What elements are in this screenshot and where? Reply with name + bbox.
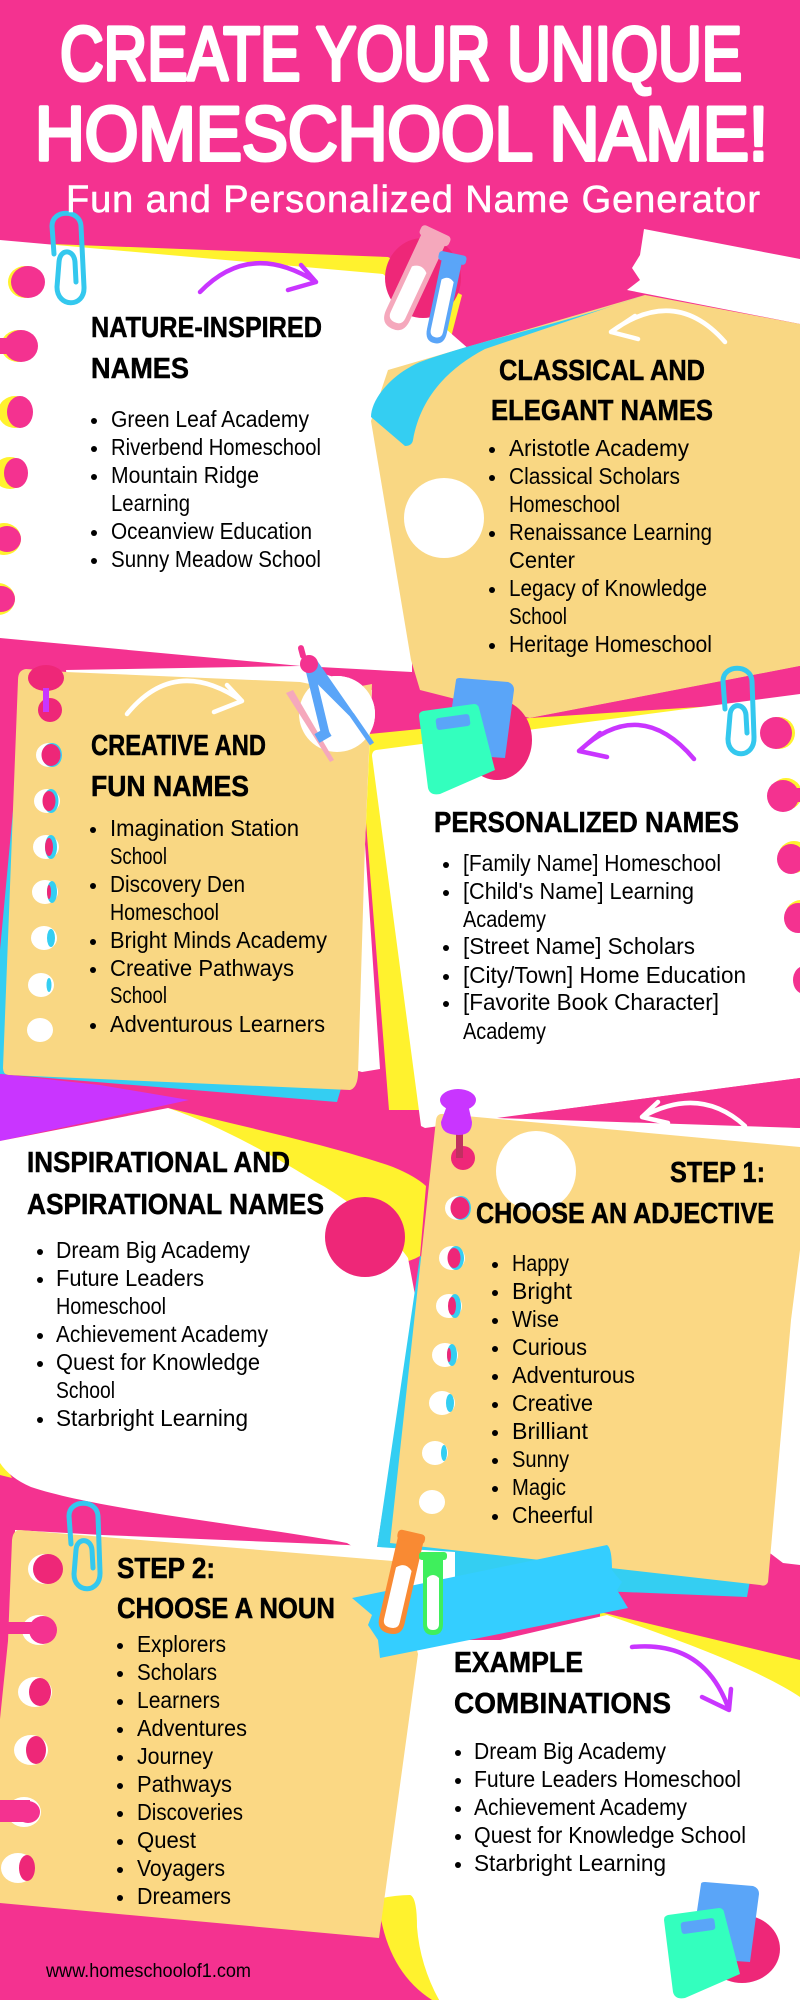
list: example combinations: Dream Big Academy bbox=[474, 1738, 666, 1764]
heading: creative and fun names bbox=[91, 730, 266, 803]
list: classical names: Center bbox=[509, 547, 575, 573]
arrow: purple curved bbox=[200, 263, 316, 292]
list: personalized names: Academy bbox=[463, 1018, 546, 1044]
panel: example combinations bbox=[378, 1612, 800, 2000]
icon: books bbox=[664, 1882, 780, 1998]
list: nouns: Voyagers bbox=[137, 1855, 225, 1881]
list: nouns: Adventures bbox=[137, 1715, 247, 1741]
list: classical names: Homeschool bbox=[509, 491, 620, 517]
heading: creative and fun names: CREATIVE AND bbox=[91, 730, 266, 762]
heading: personalized names: PERSONALIZED NAMES bbox=[434, 807, 739, 839]
icon: blue tape bbox=[352, 1545, 628, 1658]
list: adjectives: Wise bbox=[512, 1306, 559, 1332]
heading: inspirational and aspirational names: INSPIRATIONAL AND bbox=[27, 1147, 290, 1179]
list: creative names: School bbox=[110, 982, 167, 1008]
panel: nature-inspired names bbox=[0, 213, 470, 672]
list: personalized names: [Street Name] Scholars bbox=[463, 933, 695, 959]
list: adjectives: Curious bbox=[512, 1334, 587, 1360]
list: creative names: Adventurous Learners bbox=[110, 1011, 325, 1037]
list: inspirational names: Homeschool bbox=[56, 1293, 166, 1319]
title bbox=[35, 12, 768, 177]
list: adjectives: Cheerful bbox=[512, 1502, 593, 1528]
heading: step 1: STEP 1: bbox=[670, 1157, 765, 1189]
icon: test tubes pink and blue bbox=[377, 224, 467, 346]
panel: personalized names bbox=[359, 666, 800, 1128]
list: classical names: Aristotle Academy bbox=[509, 435, 689, 461]
list: inspirational names: Dream Big Academy bbox=[56, 1237, 250, 1263]
arrow: purple curved bbox=[579, 725, 694, 759]
list: creative names: Discovery Den bbox=[110, 871, 245, 897]
panel: creative and fun names bbox=[0, 644, 380, 1102]
list: example combinations: Starbright Learning bbox=[474, 1850, 666, 1876]
list: nouns: Discoveries bbox=[137, 1799, 243, 1825]
icon: test tubes orange and green bbox=[375, 1529, 447, 1637]
panel: step 2 choose a noun bbox=[0, 1503, 455, 1938]
list: example combinations: Quest for Knowledge School bbox=[474, 1822, 746, 1848]
panel: classical and elegant names bbox=[371, 229, 800, 718]
subtitle: Fun and Personalized Name Generator bbox=[66, 179, 760, 221]
heading: nature-inspired names bbox=[91, 312, 322, 385]
list: personalized names: [Favorite Book Character] bbox=[463, 989, 719, 1015]
heading: step 2: STEP 2: bbox=[117, 1553, 215, 1585]
list: personalized names: [City/Town] Home Education bbox=[463, 962, 746, 988]
list: nouns: Scholars bbox=[137, 1659, 217, 1685]
list: nature names: Sunny Meadow School bbox=[111, 546, 321, 572]
icon: hole punches bbox=[27, 743, 62, 1042]
arrow: white curved bbox=[611, 311, 725, 342]
list: adjectives: Brilliant bbox=[512, 1418, 589, 1444]
heading: step 2: CHOOSE A NOUN bbox=[117, 1593, 335, 1625]
list: creative names: Creative Pathways bbox=[110, 955, 294, 981]
list: personalized names: [Family Name] Homeschool bbox=[463, 850, 721, 876]
list: nature names: Mountain Ridge bbox=[111, 462, 259, 488]
list: classical names bbox=[489, 435, 712, 657]
heading: example combinations: EXAMPLE bbox=[454, 1647, 583, 1679]
list: adjectives: Happy bbox=[512, 1250, 569, 1276]
list: adjectives: Creative bbox=[512, 1390, 593, 1416]
heading: inspirational and aspirational names: ASPIRATIONAL NAMES bbox=[27, 1189, 324, 1221]
footer url: www.homeschoolof1.com bbox=[45, 1961, 251, 1982]
list: inspirational names: Starbright Learning bbox=[56, 1405, 248, 1431]
heading: nature-inspired names: NAMES bbox=[91, 353, 189, 385]
list: nature names bbox=[91, 406, 321, 572]
list: inspirational names: School bbox=[56, 1377, 115, 1403]
list: adjectives bbox=[492, 1250, 635, 1528]
arrow: purple curved bbox=[632, 1646, 731, 1710]
list: creative names: School bbox=[110, 843, 167, 869]
list: classical names: School bbox=[509, 603, 567, 629]
list: nouns: Learners bbox=[137, 1687, 220, 1713]
arrow: white curved bbox=[127, 681, 242, 714]
heading: classical and elegant names bbox=[491, 355, 713, 427]
list: classical names: Legacy of Knowledge bbox=[509, 575, 707, 601]
list: nature names: Learning bbox=[111, 490, 190, 516]
list: classical names: Classical Scholars bbox=[509, 463, 680, 489]
list: inspirational names: Achievement Academy bbox=[56, 1321, 268, 1347]
list: nouns: Dreamers bbox=[137, 1883, 231, 1909]
list: nouns: Pathways bbox=[137, 1771, 232, 1797]
arrow: white curved bbox=[642, 1102, 745, 1126]
icon: paperclip bbox=[52, 213, 84, 303]
heading: nature-inspired names: NATURE-INSPIRED bbox=[91, 312, 322, 344]
heading: example combinations: COMBINATIONS bbox=[454, 1688, 671, 1720]
icon: hole punches bbox=[0, 1554, 63, 1883]
heading: classical and elegant names: CLASSICAL AND bbox=[499, 355, 705, 387]
list: creative names: Imagination Station bbox=[110, 815, 299, 841]
list: example combinations bbox=[455, 1738, 746, 1876]
list: classical names: Renaissance Learning bbox=[509, 519, 712, 545]
list: inspirational names: Quest for Knowledge bbox=[56, 1349, 260, 1375]
list: nouns: Explorers bbox=[137, 1631, 226, 1657]
panel: inspirational and aspirational names bbox=[0, 1074, 426, 1560]
list: personalized names bbox=[443, 850, 746, 1044]
heading: classical and elegant names: ELEGANT NAMES bbox=[491, 395, 713, 427]
list: example combinations: Future Leaders Homeschool bbox=[474, 1766, 741, 1792]
icon: push pin bbox=[28, 665, 64, 722]
list: inspirational names bbox=[37, 1237, 268, 1431]
heading: creative and fun names: FUN NAMES bbox=[91, 771, 249, 803]
heading: step 1 bbox=[476, 1157, 774, 1230]
heading: example combinations bbox=[454, 1647, 671, 1720]
list: nature names: Green Leaf Academy bbox=[111, 406, 309, 432]
icon: hole punches bbox=[419, 1196, 471, 1514]
list: example combinations: Achievement Academy bbox=[474, 1794, 687, 1820]
list: adjectives: Sunny bbox=[512, 1446, 569, 1472]
heading: step 2 bbox=[117, 1553, 335, 1625]
list: nouns: Quest bbox=[137, 1827, 197, 1853]
list: nature names: Oceanview Education bbox=[111, 518, 312, 544]
list: inspirational names: Future Leaders bbox=[56, 1265, 204, 1291]
list: classical names: Heritage Homeschool bbox=[509, 631, 712, 657]
icon: compass and pencil bbox=[286, 644, 372, 762]
list: adjectives: Magic bbox=[512, 1474, 566, 1500]
heading: inspirational and aspirational names bbox=[27, 1147, 324, 1221]
list: personalized names: Academy bbox=[463, 906, 546, 932]
list: adjectives: Adventurous bbox=[512, 1362, 635, 1388]
icon: books bbox=[419, 678, 532, 794]
list: adjectives: Bright bbox=[512, 1278, 573, 1304]
list: nature names: Riverbend Homeschool bbox=[111, 434, 321, 460]
icon: paperclip bbox=[69, 1503, 100, 1589]
icon: push pin bbox=[440, 1089, 476, 1170]
list: nouns bbox=[117, 1631, 247, 1909]
list: creative names: Bright Minds Academy bbox=[110, 927, 327, 953]
icon: hole punches bbox=[760, 717, 800, 994]
list: creative names bbox=[90, 815, 327, 1037]
list: creative names: Homeschool bbox=[110, 899, 219, 925]
panel: step 1 choose an adjective bbox=[373, 1078, 800, 1597]
icon: paperclip bbox=[723, 668, 754, 754]
list: personalized names: [Child's Name] Learning bbox=[463, 878, 694, 904]
list: nouns: Journey bbox=[137, 1743, 213, 1769]
